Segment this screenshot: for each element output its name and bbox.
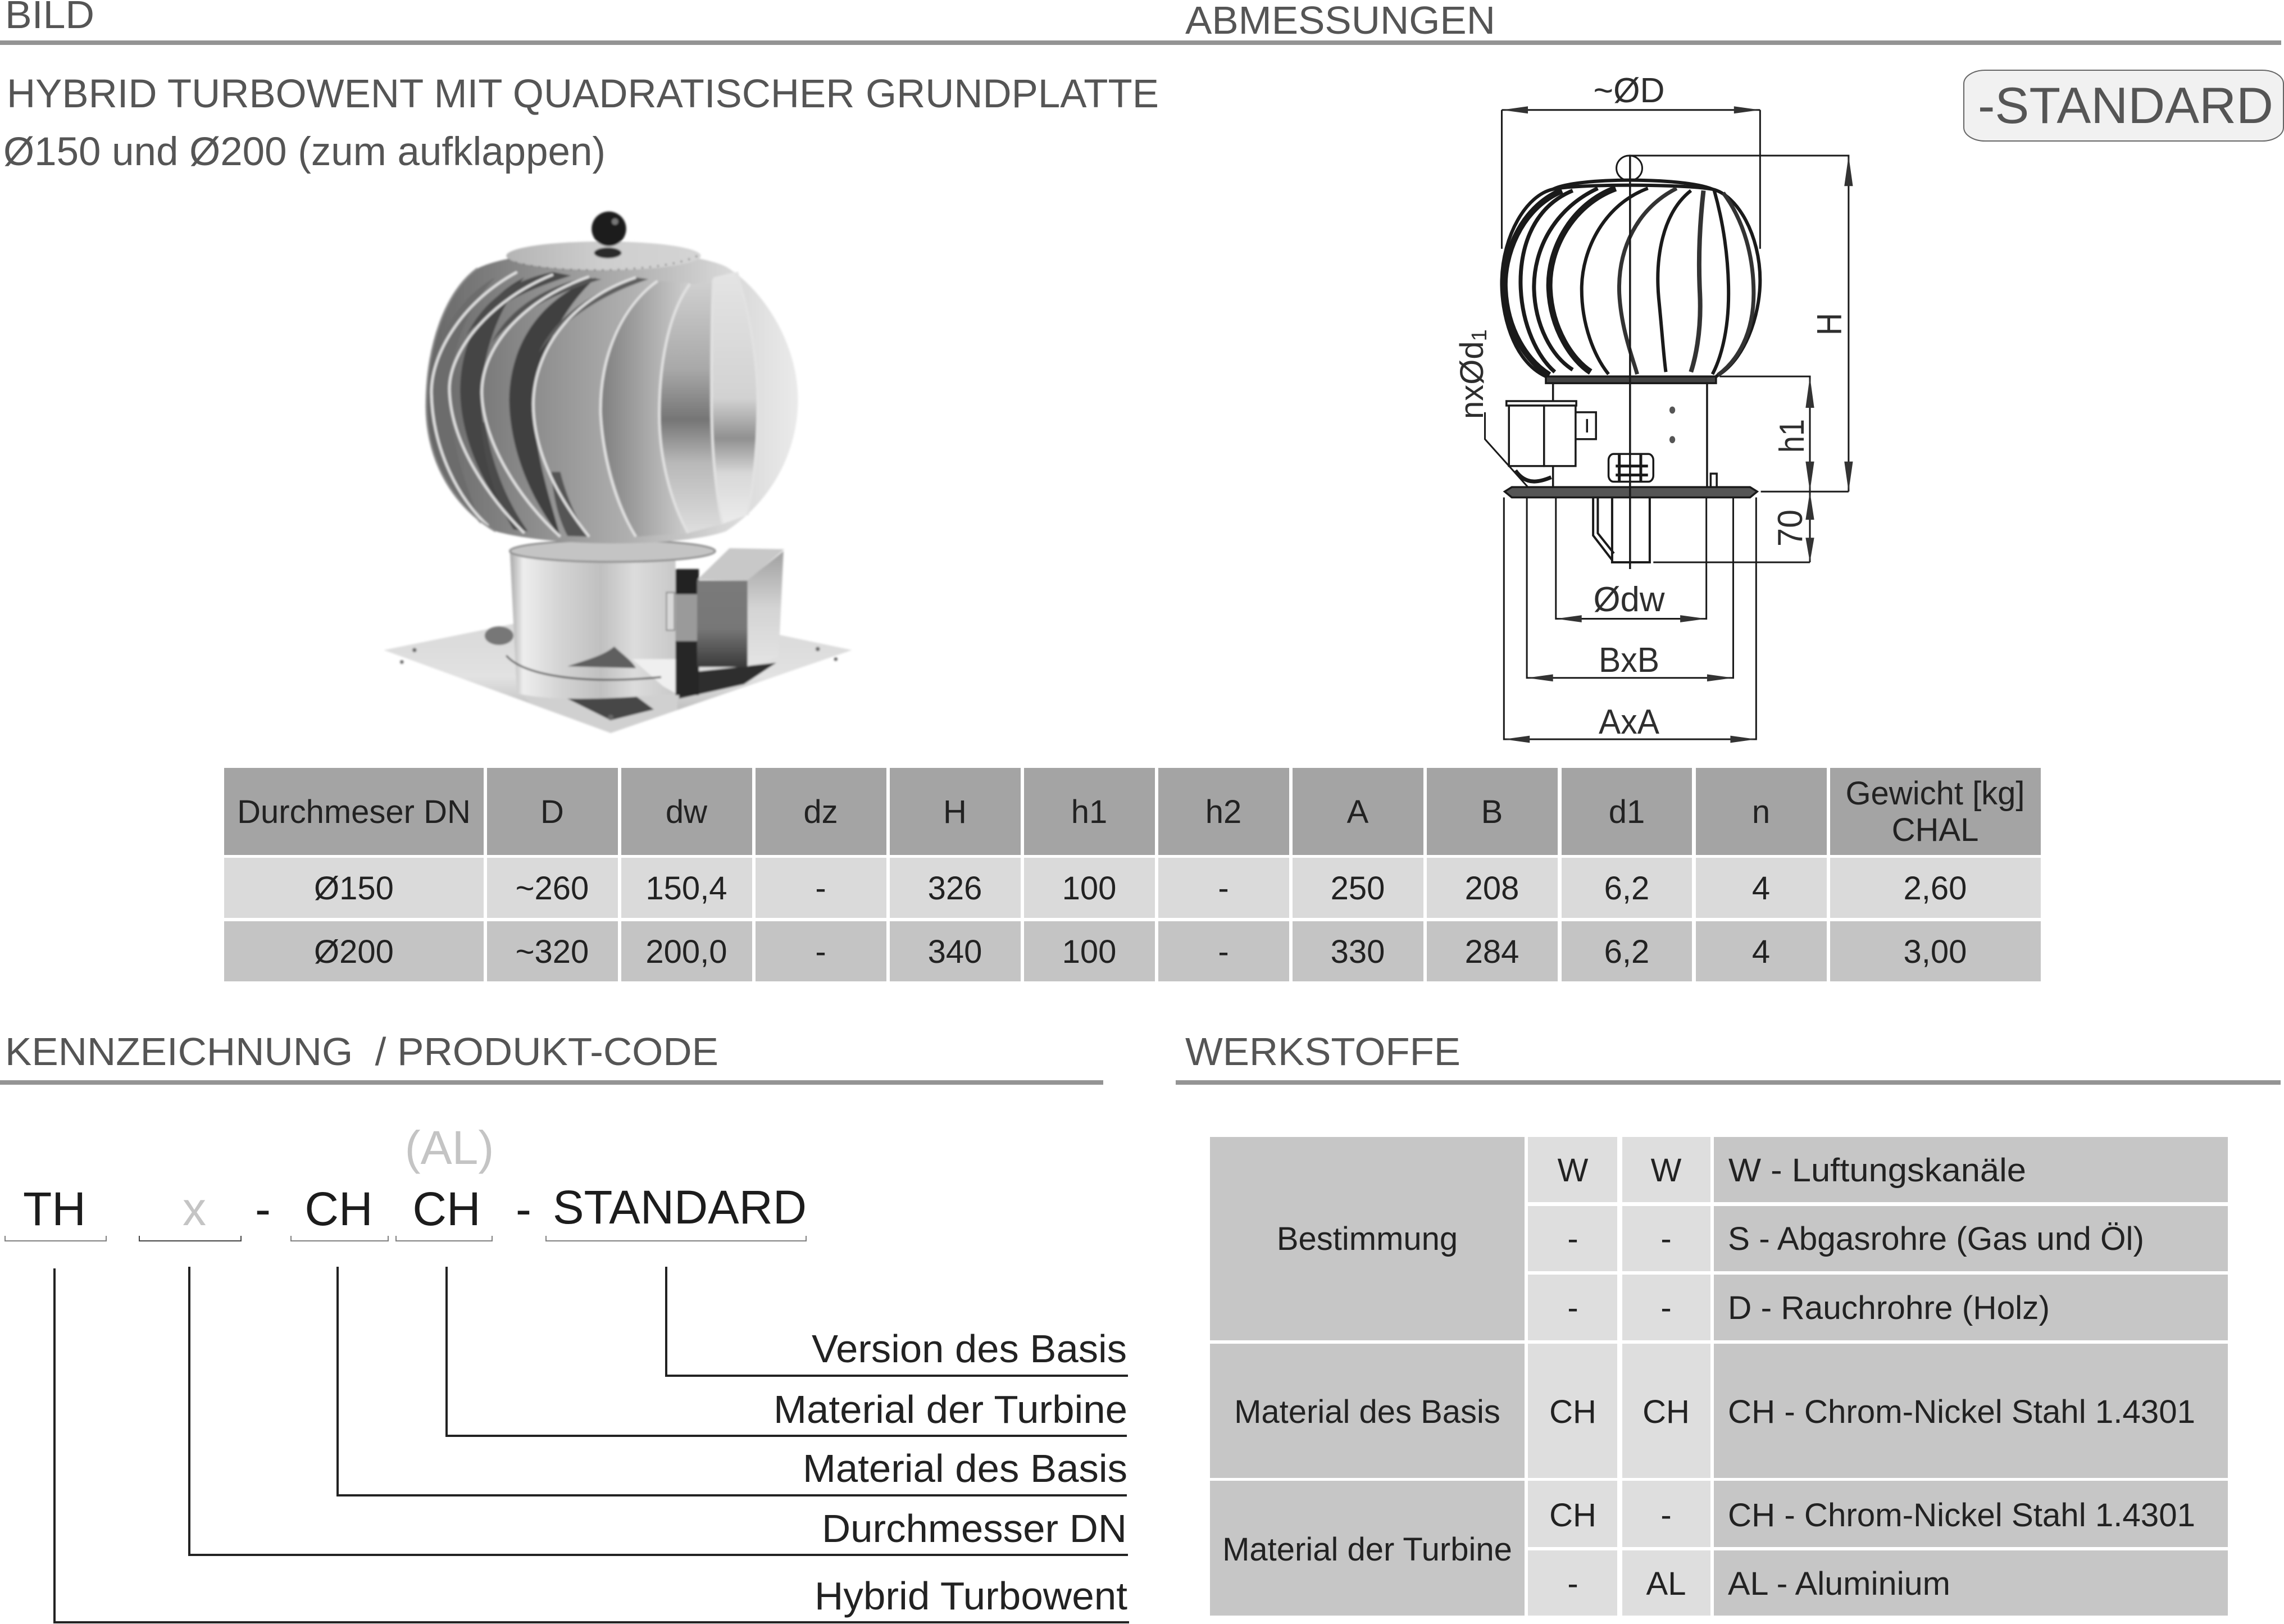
table row: 200: - xyxy=(1218,934,1229,970)
leader labels: Version des Basis xyxy=(812,1327,1127,1371)
table row: 200: 200,0 xyxy=(645,934,727,970)
table row: 200: 3,00 xyxy=(1904,934,1967,970)
row group: Material der Turbine xyxy=(1210,1481,2228,1616)
dimension labels: Ødw xyxy=(1593,580,1665,619)
table row: 200: 330 xyxy=(1331,934,1385,970)
table row: 150: 150,4 xyxy=(645,870,727,907)
row group: Material der Turbine: AL xyxy=(1646,1566,1686,1602)
table row: 150: 250 xyxy=(1331,870,1385,907)
table row: 200: 6,2 xyxy=(1604,934,1649,970)
dimension labels: AxA xyxy=(1599,703,1660,742)
row group: Material der Turbine: CH xyxy=(1549,1497,1596,1534)
row group: Bestimmung: W - Luftungskanäle xyxy=(1728,1152,2026,1189)
table header row xyxy=(224,768,2041,855)
dimension labels: H xyxy=(1810,313,1849,335)
dimension labels: BxB xyxy=(1599,641,1659,680)
table row: 200: 4 xyxy=(1752,934,1770,970)
table row: 150: Ø150 xyxy=(314,870,394,907)
table row: 150: 100 xyxy=(1062,870,1116,907)
table row: 150: 326 xyxy=(928,870,982,907)
brackets under code segments xyxy=(5,1236,806,1241)
product title: Ø150 und Ø200 (zum aufklappen) xyxy=(3,130,606,174)
dimension labels xyxy=(1454,71,1849,742)
row group: Material der Turbine: CH - Chrom-Nickel Stahl 1.4301 xyxy=(1728,1497,2195,1534)
materials table xyxy=(1210,1137,2228,1616)
dimension labels: ~ØD xyxy=(1593,71,1665,110)
leader lines xyxy=(54,1267,1129,1622)
table header row: B xyxy=(1481,794,1503,830)
table header row: dw xyxy=(666,794,708,830)
table row: 200: 340 xyxy=(928,934,982,970)
row group: Bestimmung: W xyxy=(1558,1152,1589,1189)
badge: -STANDARD: -STANDARD xyxy=(1978,78,2273,134)
arrowheads xyxy=(1502,106,1853,743)
row group: Bestimmung: - xyxy=(1660,1221,1672,1257)
leader labels: Hybrid Turbowent xyxy=(815,1574,1127,1618)
row group: Material der Turbine: AL - Aluminium xyxy=(1728,1566,1950,1602)
leader labels: Material der Turbine xyxy=(774,1388,1127,1431)
code segments: - xyxy=(516,1182,531,1235)
dimension labels: h1 xyxy=(1773,419,1812,453)
table row: 150 xyxy=(224,858,2041,918)
dimensions table xyxy=(224,768,2041,981)
table header row: dz xyxy=(803,794,838,830)
code segments: CH xyxy=(412,1182,481,1235)
technical drawing with dimensions xyxy=(1454,71,1853,743)
product photo: hybrid turbine on square base plate xyxy=(384,212,852,733)
code segments: - xyxy=(255,1182,271,1235)
turbine outline and ribs xyxy=(1502,156,1760,376)
table header row: d1 xyxy=(1609,794,1645,830)
base, box and plate xyxy=(1505,154,1757,569)
code segments: CH xyxy=(304,1182,373,1235)
row group: Bestimmung: S - Abgasrohre (Gas und Öl) xyxy=(1728,1221,2144,1257)
table header row: n xyxy=(1752,794,1770,830)
row group: Bestimmung: D - Rauchrohre (Holz) xyxy=(1728,1290,2050,1326)
row group: Material des Basis: CH xyxy=(1643,1394,1690,1430)
product code diagram xyxy=(5,1121,1129,1622)
row group: Bestimmung: - xyxy=(1567,1221,1578,1257)
table header row: D xyxy=(540,794,564,830)
table row: 150: 6,2 xyxy=(1604,870,1649,907)
row group: Bestimmung: Bestimmung xyxy=(1277,1221,1458,1257)
row group: Material des Basis: CH - Chrom-Nickel Stahl 1.4301 xyxy=(1728,1394,2195,1430)
table header row: Durchmeser DN xyxy=(237,794,471,830)
base cylinder xyxy=(506,540,715,699)
dimension labels: 1 xyxy=(1468,329,1491,341)
code segments: STANDARD xyxy=(553,1181,807,1234)
table header row: CHAL xyxy=(1892,812,1978,848)
table row: 150: - xyxy=(1218,870,1229,907)
leader labels xyxy=(774,1327,1127,1618)
table row: 150: ~260 xyxy=(516,870,589,907)
table row: 150: 4 xyxy=(1752,870,1770,907)
table header row: h2 xyxy=(1205,794,1241,830)
turbine lid with rivets and knob xyxy=(506,212,700,270)
product title xyxy=(3,72,1159,174)
row group: Bestimmung: - xyxy=(1660,1290,1672,1326)
junction box xyxy=(667,548,784,695)
dimension labels: nxØd xyxy=(1454,341,1490,419)
base plate xyxy=(384,621,852,733)
code segments: x xyxy=(183,1182,206,1235)
row group: Material des Basis xyxy=(1210,1344,2228,1478)
row group: Material des Basis: Material des Basis xyxy=(1234,1394,1500,1430)
table row: 200 xyxy=(224,921,2041,981)
leader labels: Material des Basis xyxy=(803,1446,1127,1490)
table row: 200: Ø200 xyxy=(314,934,394,970)
row group: Bestimmung: W xyxy=(1651,1152,1682,1189)
row group: Bestimmung xyxy=(1210,1137,2228,1340)
table row: 150: 2,60 xyxy=(1904,870,1967,907)
line art of the turbine xyxy=(1485,106,1853,743)
row group: Material der Turbine: Material der Turbine xyxy=(1222,1531,1512,1568)
table row: 200: 100 xyxy=(1062,934,1116,970)
table header row: H xyxy=(943,794,967,830)
table header row: h1 xyxy=(1071,794,1107,830)
row group: Material des Basis: CH xyxy=(1549,1394,1596,1430)
dimension labels: 70 xyxy=(1771,510,1810,547)
table header row: Gewicht [kg] xyxy=(1845,775,2025,812)
section heading: Kennzeichnung / Produkt-Code: KENNZEICHNUNG / PRODUKT-CODE xyxy=(5,1030,718,1073)
product title: HYBRID TURBOWENT MIT QUADRATISCHER GRUNDPLATTE xyxy=(7,72,1159,116)
table row: 200: ~320 xyxy=(516,934,589,970)
leader labels: Durchmesser DN xyxy=(822,1507,1127,1550)
code segments: (AL) xyxy=(405,1121,494,1174)
row group: Material der Turbine: - xyxy=(1567,1566,1578,1602)
table row: 200: 284 xyxy=(1465,934,1519,970)
code segments xyxy=(23,1121,807,1235)
table row: 200: - xyxy=(815,934,826,970)
turbine sphere xyxy=(426,251,798,543)
table row: 150: 208 xyxy=(1465,870,1519,907)
section heading: Werkstoffe: WERKSTOFFE xyxy=(1185,1030,1461,1073)
code segments: TH xyxy=(23,1182,86,1235)
row group: Material der Turbine: - xyxy=(1660,1497,1672,1534)
table row: 150: - xyxy=(815,870,826,907)
table header row: A xyxy=(1347,794,1369,830)
dimension lines xyxy=(1485,110,1849,739)
row group: Bestimmung: - xyxy=(1567,1290,1578,1326)
